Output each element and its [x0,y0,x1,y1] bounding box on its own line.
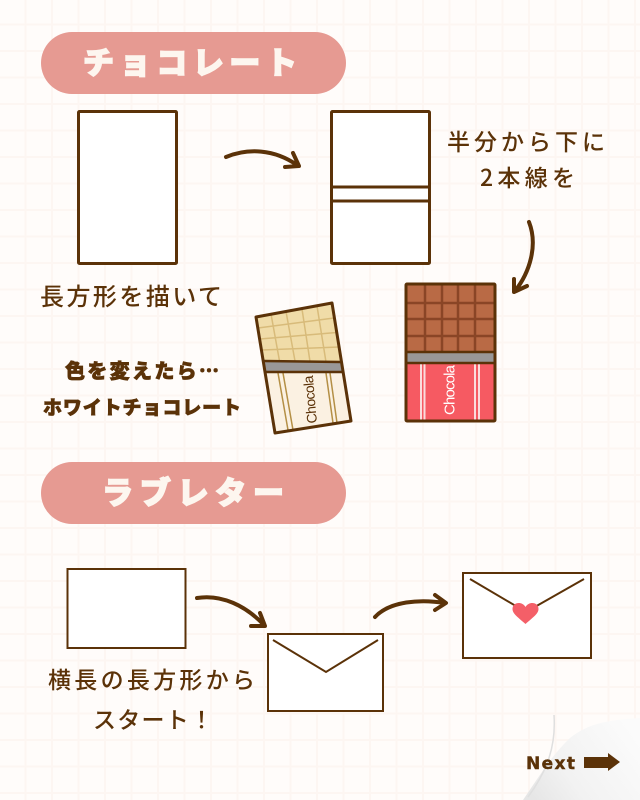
text: draw a rectangle: 長方形を描いて [40,277,222,312]
text: change the colour [43,355,241,420]
heading: love letter [41,462,346,524]
text: draw two lines from the half [447,123,605,193]
icon: heart [512,603,538,624]
text: start from a horizontal rectangle: 横長の長方形から [48,661,255,695]
chocolate bar: Chocola [442,364,458,415]
heading: chocolate [41,32,346,94]
rectangle step 1 [78,112,176,264]
envelope step 2 [268,634,383,711]
white chocolate bar: Chocola [300,375,320,424]
arrow: envelope step 2 to 3 [375,595,446,617]
white chocolate bar [256,303,351,433]
heading: love letter: ラブレター [102,468,284,513]
heading: chocolate: チョコレート [83,38,297,83]
text: start from a horizontal rectangle: スタート！ [93,701,213,735]
next label and arrow [526,753,620,774]
text: draw two lines from the half: 半分から下に [447,123,605,157]
envelope with heart [463,573,591,658]
arrow: to chocolate bar [514,222,533,292]
rectangle step 2 with two lines [331,112,430,264]
rectangle envelope step 1 [68,569,186,648]
page curl [523,715,640,800]
next label and arrow: Next [526,754,575,774]
chocolate bar [406,284,495,421]
arrow: step 1 to 2 [226,151,299,167]
text: change the colour: 色を変えたら… [65,355,219,384]
text: start from a horizontal rectangle [48,661,255,735]
text: draw two lines from the half: 2本線を [480,159,575,193]
arrow: envelope step 1 to 2 [197,597,265,626]
text: change the colour: ホワイトチョコレート [43,393,241,420]
